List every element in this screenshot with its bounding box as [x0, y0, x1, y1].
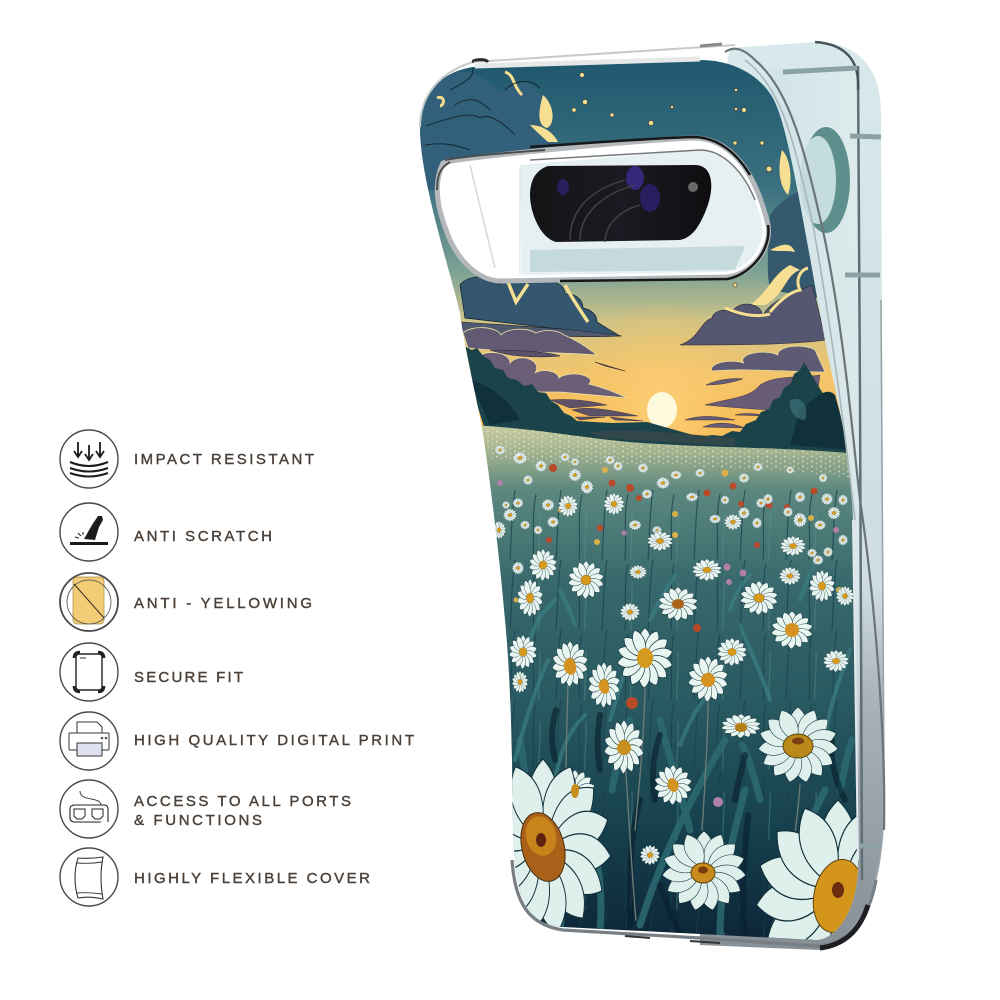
sky — [420, 60, 844, 450]
camera lens window — [530, 165, 711, 242]
sun — [647, 392, 677, 428]
feature: secure fit — [60, 643, 243, 701]
feature: highly flexible cover — [60, 848, 370, 906]
feature: anti scratch: ANTI SCRATCH — [134, 528, 272, 545]
feature: anti yellowing — [60, 573, 312, 631]
daisy: right middle — [757, 707, 839, 784]
upper left storm cloud — [420, 68, 558, 190]
large foreground daisies — [512, 706, 858, 940]
camera cutout — [437, 137, 768, 281]
feature: impact resistant: IMPACT RESISTANT — [134, 451, 314, 468]
daisy: bottom centre — [661, 831, 747, 912]
small red and pink wildflowers — [497, 464, 842, 807]
feature: access to all ports and functions: & FUNCTIONS — [134, 812, 262, 829]
feature: highly flexible cover: HIGHLY FLEXIBLE COVER — [134, 870, 370, 887]
tall grass blades — [515, 560, 852, 940]
feature: secure fit: SECURE FIT — [134, 669, 243, 686]
feature: high quality digital print — [60, 712, 414, 770]
mid-field daisies — [509, 493, 854, 865]
feature: access to all ports and functions: ACCESS TO ALL PORTS — [134, 793, 351, 810]
feature: anti scratch — [60, 503, 272, 561]
phone behind the case — [700, 42, 884, 950]
stars — [572, 73, 773, 287]
treelines — [460, 347, 860, 455]
feature: access to all ports and functions — [60, 780, 351, 838]
clear case edge highlights — [420, 44, 884, 948]
flower centres on mid daisies — [562, 599, 799, 798]
infographic canvas — [59, 40, 886, 951]
daisy: bottom right — [757, 800, 858, 940]
camera surround — [437, 138, 768, 281]
feature: high quality digital print: HIGH QUALITY DIGITAL PRINT — [134, 732, 414, 749]
features list — [60, 430, 414, 906]
camera rim — [437, 138, 768, 281]
daisy: bottom left — [512, 758, 611, 927]
small distant daisies — [492, 445, 848, 575]
feature: anti yellowing: ANTI - YELLOWING — [134, 595, 312, 612]
meadow — [470, 425, 870, 950]
right cloud band — [751, 150, 818, 305]
printed back cover artwork — [420, 60, 858, 940]
feature: impact resistant — [60, 430, 314, 488]
clouds under camera — [460, 268, 826, 428]
phone case product — [419, 40, 886, 951]
